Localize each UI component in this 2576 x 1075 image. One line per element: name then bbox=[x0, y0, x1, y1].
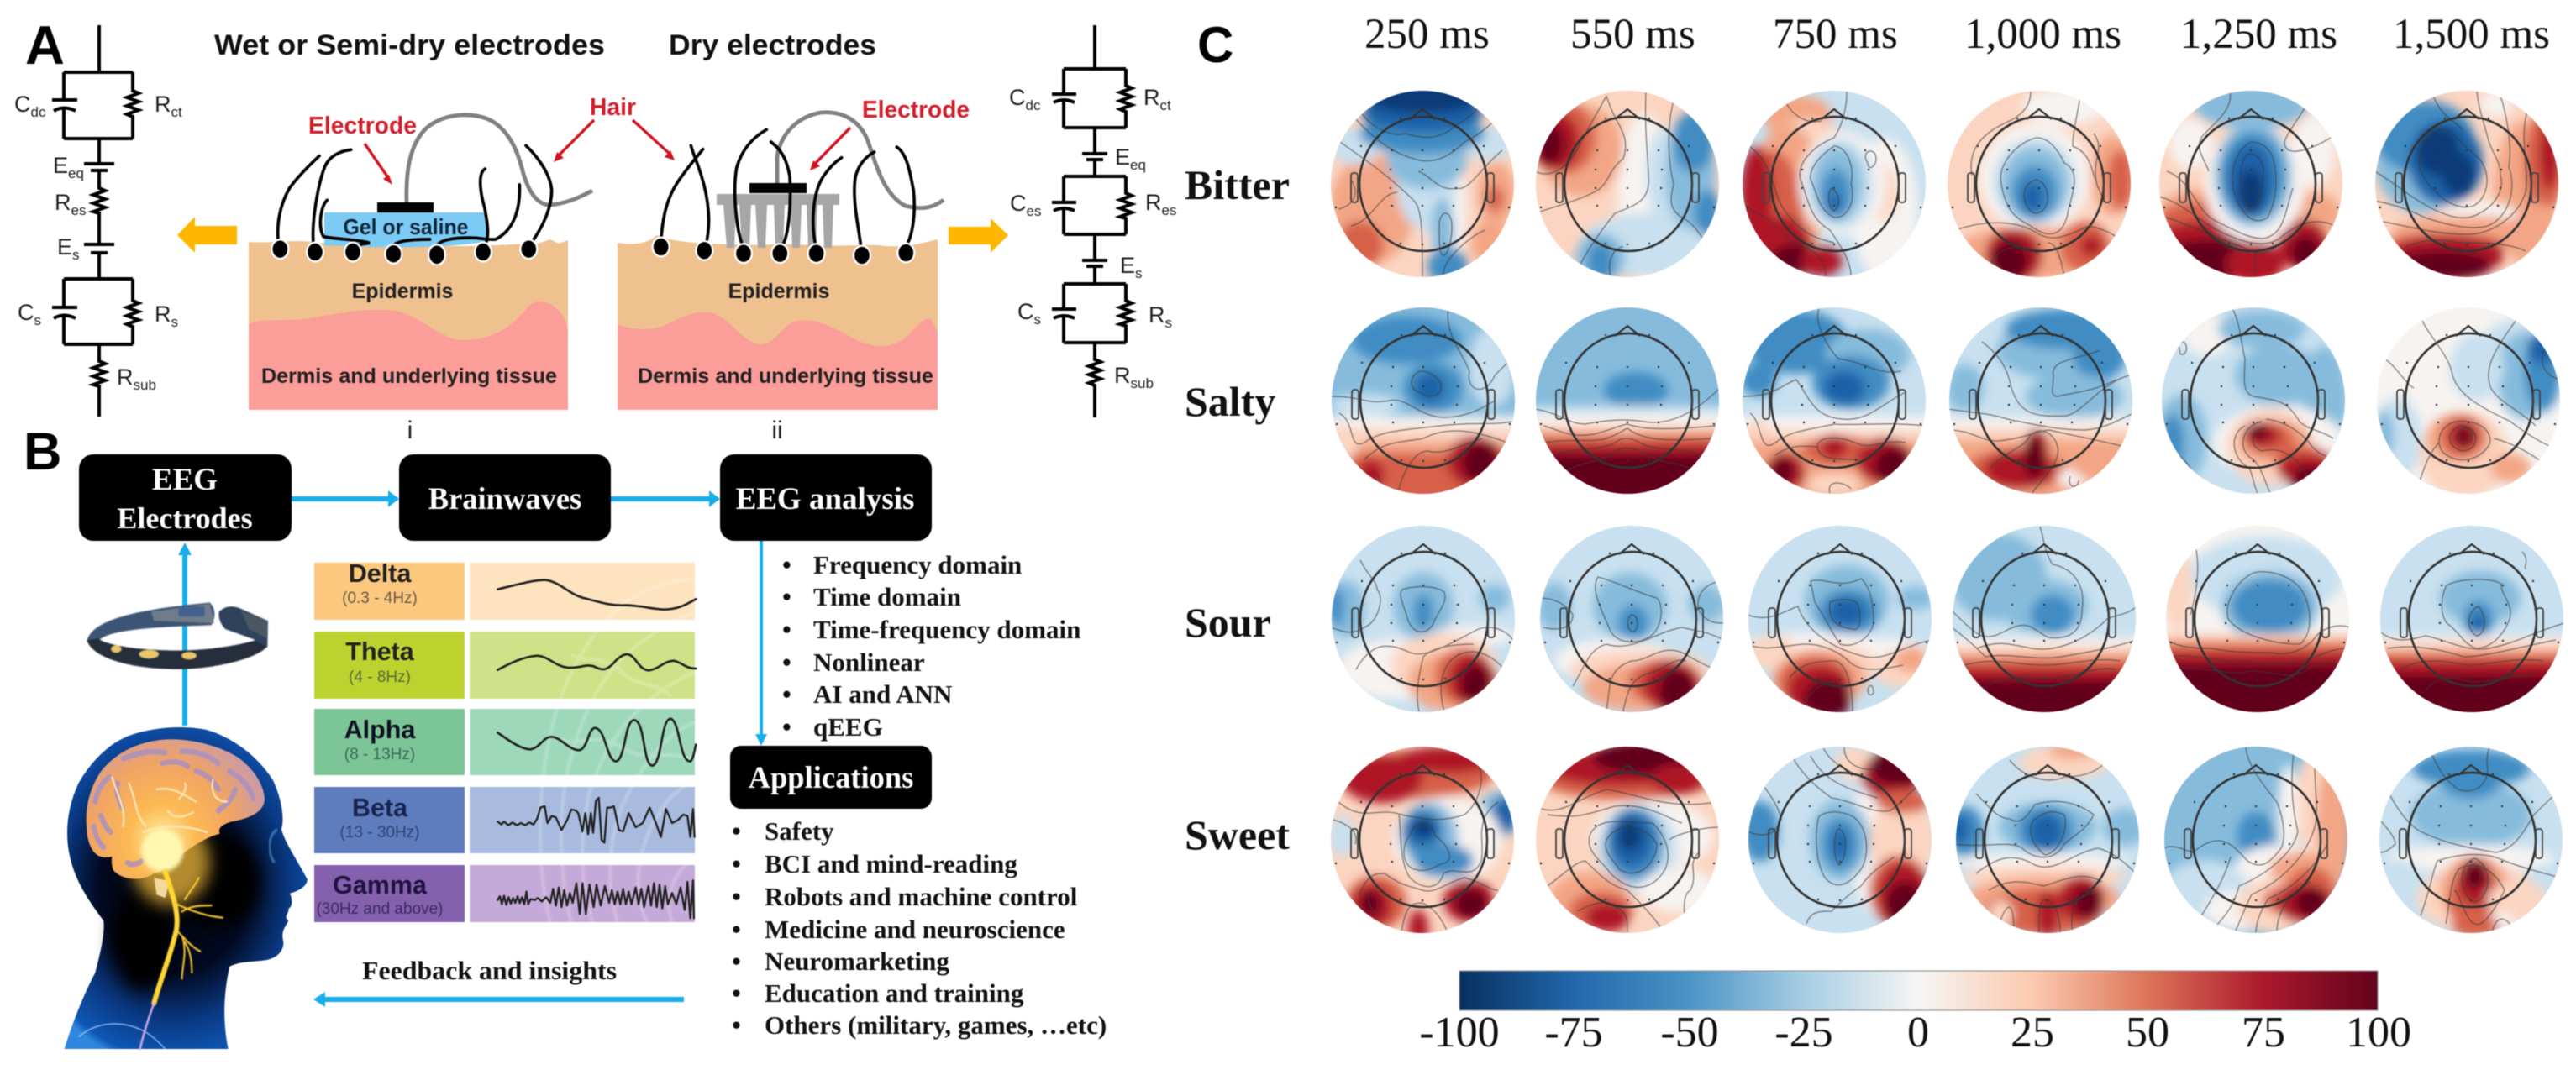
red annotations: Electrode bbox=[308, 113, 417, 139]
colorbar tick labels bbox=[1419, 1009, 2411, 1057]
box: EEG analysis bbox=[720, 454, 932, 541]
circuit: wet electrode equivalent bbox=[14, 25, 182, 417]
topomap: Sweet 250 ms bbox=[1328, 746, 1520, 947]
flow arrows bbox=[178, 490, 767, 1007]
circuit: dry electrode equivalent: C bbox=[1009, 85, 1025, 110]
circuit: dry electrode equivalent: R bbox=[1145, 190, 1161, 215]
list: applications: Safety bbox=[765, 816, 834, 846]
brain bbox=[87, 739, 265, 878]
panel B: EEG workflow bbox=[24, 422, 1107, 1049]
list: analysis methods: qEEG bbox=[813, 712, 883, 742]
circuit: dry electrode equivalent: R bbox=[1143, 85, 1159, 110]
circuit: wet electrode equivalent: R bbox=[117, 364, 133, 390]
colorbar tick labels: -25 bbox=[1774, 1009, 1833, 1057]
label: gel or saline: Gel or saline bbox=[343, 214, 469, 239]
hair strands bbox=[271, 145, 552, 265]
dark interior shading bbox=[176, 836, 260, 927]
row: alpha: (8 - 13Hz) bbox=[344, 746, 415, 763]
list: applications: • bbox=[732, 947, 741, 976]
column headers bbox=[1364, 11, 2550, 58]
panel C: taste topographic maps bbox=[1185, 11, 2573, 1057]
list: applications: Medicine and neuroscience bbox=[765, 915, 1065, 944]
list: applications: • bbox=[732, 882, 741, 911]
box: EEG analysis: EEG analysis bbox=[736, 482, 914, 517]
topomap: Bitter 750 ms bbox=[1740, 90, 1927, 281]
circuit: dry electrode equivalent: es bbox=[1161, 202, 1176, 218]
list: analysis methods: • bbox=[782, 582, 791, 611]
topomap: Sour 1,500 ms bbox=[2379, 526, 2564, 713]
comb electrode base bbox=[717, 194, 839, 248]
panel letter C: C bbox=[1197, 17, 1233, 73]
list: analysis methods: Frequency domain bbox=[813, 550, 1022, 579]
circuit: wet electrode equivalent: ct bbox=[171, 104, 182, 120]
brain stem glow bbox=[141, 829, 183, 872]
list: applications: Neuromarketing bbox=[765, 947, 949, 976]
list: analysis methods: Time-frequency domain bbox=[813, 615, 1080, 644]
image: human head with glowing brain bbox=[65, 727, 308, 1049]
column headers: 1,250 ms bbox=[2180, 11, 2337, 58]
list: applications: • bbox=[732, 816, 741, 846]
icon: EEG headband bbox=[87, 602, 268, 669]
circuit: dry electrode equivalent: C bbox=[1010, 191, 1027, 216]
heading: dry electrodes: Dry electrodes bbox=[669, 29, 876, 61]
list: applications: BCI and mind-reading bbox=[765, 849, 1017, 878]
circuit: wet electrode equivalent: C bbox=[18, 300, 34, 325]
list: analysis methods: • bbox=[782, 550, 791, 579]
circuit: wet electrode equivalent: sub bbox=[133, 377, 156, 393]
circuit: dry electrode equivalent: s bbox=[1135, 265, 1143, 281]
panel letter B: B bbox=[24, 422, 62, 481]
row: beta bbox=[314, 787, 695, 853]
row: theta: Theta bbox=[345, 637, 415, 666]
lead wire bbox=[777, 113, 944, 208]
topomap: Salty 550 ms bbox=[1535, 307, 1720, 495]
label: ii: ii bbox=[771, 417, 783, 444]
red annotations: Hair bbox=[590, 94, 636, 121]
box: EEG Electrodes: EEG bbox=[152, 463, 218, 497]
circuit: wet electrode equivalent: R bbox=[155, 92, 171, 117]
list: analysis methods bbox=[782, 550, 1080, 742]
box: EEG Electrodes bbox=[79, 454, 292, 541]
list: applications: • bbox=[732, 978, 741, 1008]
column headers: 250 ms bbox=[1364, 11, 1490, 58]
topomap: Sour 250 ms bbox=[1327, 525, 1516, 713]
circuit: dry electrode equivalent: E bbox=[1120, 253, 1135, 278]
row: gamma: Gamma bbox=[333, 871, 428, 899]
colorbar tick labels: 0 bbox=[1907, 1009, 1929, 1057]
heading: wet or semi-dry electrodes: Wet or Semi-dry electrodes bbox=[214, 29, 605, 61]
epidermis layer bbox=[249, 239, 568, 410]
lead wire bbox=[407, 115, 592, 205]
topomap: Sweet 1,250 ms bbox=[2162, 746, 2350, 934]
colorbar tick labels: 75 bbox=[2242, 1009, 2285, 1057]
circuit: dry electrode equivalent: R bbox=[1149, 302, 1164, 328]
row: beta: Beta bbox=[352, 794, 408, 822]
epidermis layer bbox=[618, 235, 938, 410]
box: EEG Electrodes: Electrodes bbox=[117, 501, 253, 535]
circuit: wet electrode equivalent: R bbox=[55, 190, 71, 215]
topomap: Sour 1,250 ms bbox=[2166, 526, 2349, 713]
row: alpha: Alpha bbox=[344, 716, 416, 744]
circuit: wet electrode equivalent: E bbox=[53, 153, 68, 178]
topomap: Sweet 550 ms bbox=[1535, 741, 1720, 934]
colorbar bbox=[1419, 971, 2411, 1057]
colorbar tick labels: 50 bbox=[2126, 1009, 2169, 1057]
topomap: Sweet 1,500 ms bbox=[2378, 746, 2563, 937]
circuit: wet electrode equivalent: s bbox=[72, 247, 80, 263]
box: Applications: Applications bbox=[749, 760, 913, 794]
circuit: dry electrode equivalent: E bbox=[1115, 144, 1130, 170]
list: analysis methods: • bbox=[782, 679, 791, 709]
circuit: dry electrode equivalent: s bbox=[1164, 315, 1172, 331]
topomap: Bitter 250 ms bbox=[1330, 80, 1515, 285]
brain folds bbox=[94, 752, 254, 864]
electrode bbox=[377, 202, 434, 212]
circuit: dry electrode equivalent: eq bbox=[1130, 157, 1146, 173]
topomap: Salty 1,000 ms bbox=[1949, 307, 2132, 495]
list: applications: • bbox=[732, 1010, 741, 1040]
yellow arrow right bbox=[949, 218, 1008, 253]
topomap: Bitter 1,000 ms bbox=[1947, 88, 2135, 282]
circuit: wet electrode equivalent: eq bbox=[68, 165, 84, 181]
red annotations bbox=[308, 94, 970, 185]
topomap: Salty 250 ms bbox=[1331, 307, 1516, 495]
skin diagram ii: dry electrode bbox=[618, 113, 944, 444]
dark neck shading bbox=[112, 887, 174, 991]
row headers: Salty bbox=[1185, 378, 1275, 425]
circuit: dry electrode equivalent: ct bbox=[1159, 97, 1171, 113]
topomap: Sweet 1,000 ms bbox=[1955, 746, 2139, 934]
list: analysis methods: • bbox=[782, 648, 791, 677]
circuit: dry electrode equivalent: R bbox=[1114, 363, 1131, 388]
list: applications: Others (military, games, …etc) bbox=[765, 1010, 1107, 1040]
panel A: electrode skin interface bbox=[14, 14, 1176, 444]
row: delta: (0.3 - 4Hz) bbox=[342, 590, 418, 607]
dermis layer bbox=[618, 312, 938, 410]
circuit: dry electrode equivalent: sub bbox=[1131, 375, 1154, 391]
circuit: dry electrode equivalent bbox=[1009, 25, 1176, 417]
list: applications: Robots and machine control bbox=[765, 882, 1078, 911]
box: Brainwaves bbox=[399, 454, 611, 541]
list: analysis methods: • bbox=[782, 615, 791, 644]
row: delta: Delta bbox=[349, 559, 412, 588]
topomap: Bitter 550 ms bbox=[1532, 90, 1724, 283]
list: analysis methods: Time domain bbox=[813, 582, 961, 611]
list: applications: • bbox=[732, 915, 741, 944]
colorbar tick labels: -50 bbox=[1660, 1009, 1719, 1057]
topomap: Sour 1,000 ms bbox=[1953, 526, 2136, 713]
row headers: Sweet bbox=[1185, 811, 1290, 858]
warm glow bbox=[132, 820, 210, 905]
electrode bbox=[749, 183, 807, 193]
topomap: Bitter 1,500 ms bbox=[2374, 90, 2564, 281]
circuit: dry electrode equivalent: s bbox=[1033, 312, 1041, 328]
row headers bbox=[1185, 161, 1290, 858]
list: applications: Education and training bbox=[765, 978, 1024, 1008]
label: epidermis: Epidermis bbox=[728, 280, 829, 303]
circuit: dry electrode equivalent: C bbox=[1017, 299, 1033, 324]
list: analysis methods: Nonlinear bbox=[813, 648, 925, 677]
circuit: wet electrode equivalent: s bbox=[171, 314, 178, 330]
row: alpha bbox=[314, 709, 695, 775]
topomap: Salty 750 ms bbox=[1743, 307, 1926, 494]
circuit: wet electrode equivalent: E bbox=[57, 234, 72, 260]
column headers: 1,500 ms bbox=[2393, 11, 2550, 58]
circuit: dry electrode equivalent: es bbox=[1027, 203, 1041, 219]
colorbar tick labels: 25 bbox=[2011, 1009, 2054, 1057]
panel letter A: A bbox=[25, 14, 65, 76]
circuit: wet electrode equivalent: C bbox=[14, 92, 30, 117]
head silhouette bbox=[65, 727, 308, 1049]
yellow arrow left bbox=[177, 217, 237, 253]
row: gamma: (30Hz and above) bbox=[316, 900, 444, 918]
label: dermis: Dermis and underlying tissue bbox=[638, 364, 933, 388]
spinal nerves bbox=[140, 872, 223, 1049]
brainwave table bbox=[314, 559, 696, 922]
column headers: 550 ms bbox=[1570, 11, 1695, 58]
row: theta bbox=[314, 632, 695, 699]
label: feedback and insights: Feedback and insights bbox=[362, 956, 617, 985]
colorbar tick labels: -75 bbox=[1544, 1009, 1603, 1057]
label: i: i bbox=[407, 417, 413, 444]
circuit: wet electrode equivalent: es bbox=[71, 202, 86, 218]
label: epidermis: Epidermis bbox=[352, 280, 453, 303]
colorbar tick labels: 100 bbox=[2346, 1009, 2411, 1057]
topomap: Sweet 750 ms bbox=[1742, 746, 1937, 934]
topomap: Bitter 1,250 ms bbox=[2159, 90, 2342, 278]
circuit: wet electrode equivalent: dc bbox=[30, 104, 46, 120]
gel layer bbox=[324, 212, 489, 247]
neck highlights bbox=[78, 1024, 166, 1049]
row: beta: (13 - 30Hz) bbox=[339, 824, 420, 842]
colorbar tick labels: -100 bbox=[1419, 1009, 1500, 1057]
list: analysis methods: • bbox=[782, 712, 791, 742]
row headers: Bitter bbox=[1185, 161, 1290, 208]
row headers: Sour bbox=[1185, 599, 1271, 646]
list: applications bbox=[732, 816, 1107, 1040]
dermis layer bbox=[249, 302, 568, 410]
list: applications: • bbox=[732, 849, 741, 878]
topomap: Sour 550 ms bbox=[1538, 525, 1726, 713]
list: analysis methods: AI and ANN bbox=[813, 679, 952, 709]
box: Brainwaves: Brainwaves bbox=[428, 481, 581, 516]
circuit: wet electrode equivalent: R bbox=[155, 302, 171, 327]
column headers: 750 ms bbox=[1773, 11, 1898, 58]
label: dermis: Dermis and underlying tissue bbox=[261, 364, 557, 388]
topomap: Salty 1,500 ms bbox=[2372, 307, 2561, 499]
row: delta bbox=[314, 559, 695, 620]
circuit: dry electrode equivalent: dc bbox=[1025, 97, 1041, 113]
circuit: wet electrode equivalent: s bbox=[34, 312, 41, 328]
wave traces bbox=[497, 580, 696, 918]
brain watermark bbox=[540, 579, 695, 922]
skin diagram i: wet electrode bbox=[249, 115, 592, 444]
hair strands bbox=[653, 129, 914, 265]
topomap: Salty 1,250 ms bbox=[2157, 307, 2347, 495]
box: Applications bbox=[730, 746, 932, 809]
red annotations: Electrode bbox=[862, 97, 970, 123]
row: gamma bbox=[314, 865, 695, 922]
topomap: Sour 750 ms bbox=[1743, 525, 1934, 720]
row: theta: (4 - 8Hz) bbox=[349, 669, 411, 686]
column headers: 1,000 ms bbox=[1964, 11, 2121, 58]
